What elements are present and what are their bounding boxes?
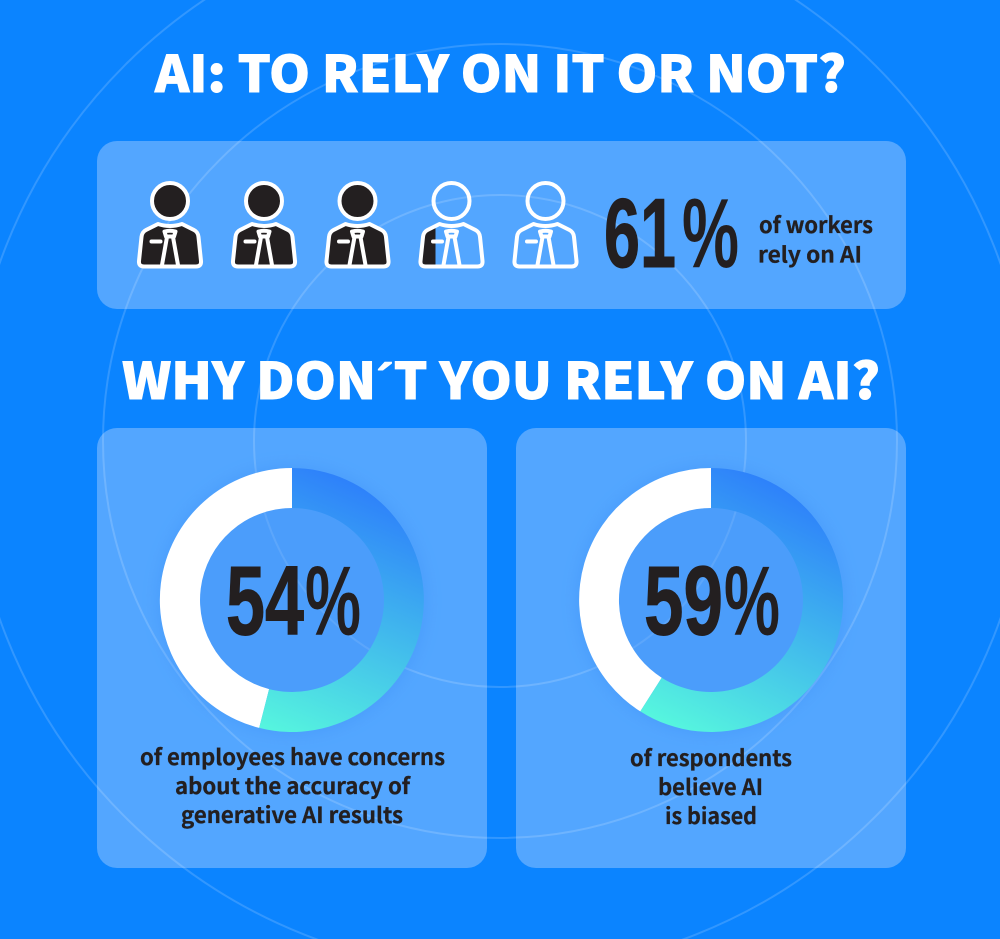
donut chart: 59 percent	[576, 465, 846, 735]
icon: worker filled 2	[233, 183, 295, 266]
donut remainder	[160, 468, 292, 728]
donut chart: 54 percent	[157, 465, 427, 735]
icon row: five workers, 61 percent filled	[139, 183, 577, 266]
text: employees concerns: generative AI results	[181, 798, 403, 830]
donut remainder	[579, 468, 711, 711]
text: respondents bias: is biased	[665, 799, 757, 831]
text: employees concerns: about the accuracy of	[175, 769, 411, 801]
stat: 59 percent: 59	[644, 546, 723, 656]
donut value arc	[640, 468, 843, 732]
stat: 54 percent: %	[305, 546, 361, 656]
text: employees concerns: of employees have concerns	[140, 740, 445, 772]
donut value arc	[259, 468, 424, 732]
icon: worker filled 1	[139, 183, 201, 266]
panel: accuracy concerns	[97, 428, 487, 868]
panel: workers relying on AI	[97, 141, 906, 309]
stat: 54 percent: 54	[226, 546, 304, 656]
text: respondents bias: believe AI	[658, 770, 763, 802]
title: AI: TO RELY ON IT OR NOT?	[154, 35, 846, 107]
text: of workers rely on AI: rely on AI	[758, 238, 862, 270]
heading: why don't you rely on AI: WHY DON ´T YOU RELY ON AI?	[122, 342, 880, 414]
stat: 61 percent: 61	[604, 178, 676, 288]
stat: 61 percent: %	[682, 178, 739, 288]
text: respondents bias: of respondents	[630, 741, 792, 773]
panel: bias beliefs	[516, 428, 906, 868]
icon: worker outline	[514, 183, 577, 266]
stat: 59 percent: %	[724, 546, 780, 656]
icon: worker partly filled	[420, 183, 483, 266]
text: of workers rely on AI: of workers	[759, 208, 873, 240]
icon: worker filled 3	[326, 183, 389, 266]
